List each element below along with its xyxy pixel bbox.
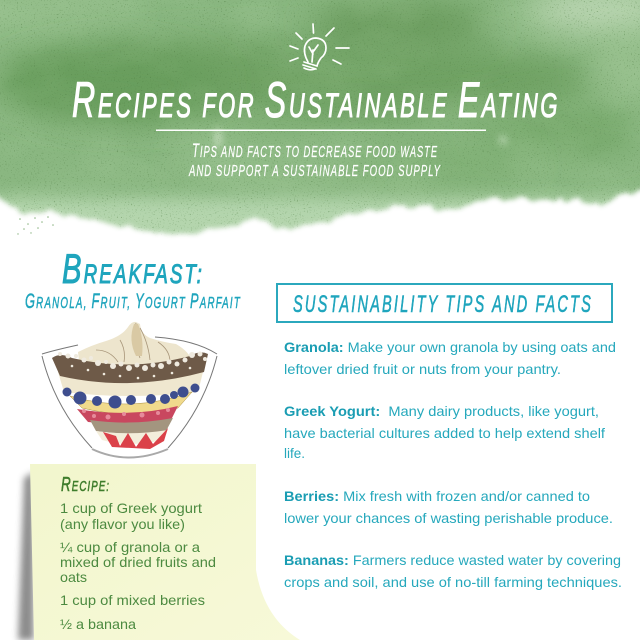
recipe ingredients: 1 cup of Greek yogurt	[60, 500, 202, 516]
panel: recipe sticky note	[30, 464, 300, 640]
tip: bananas: Bananas: Farmers reduce wasted water by covering	[284, 552, 621, 568]
recipe heading: RECIPE:	[61, 474, 110, 496]
title rule	[156, 130, 486, 131]
banana layer	[70, 392, 192, 414]
tip: greek yogurt: Greek Yogurt: Many dairy products, like yogurt,	[284, 403, 599, 419]
icon: light bulb	[290, 24, 349, 70]
title: RECIPES FOR SUSTAINABLE EATING	[72, 72, 560, 128]
tip: granola	[284, 339, 616, 377]
raspberries	[77, 406, 178, 424]
illustration: parfait bowl	[42, 322, 217, 458]
lower granola	[90, 418, 173, 434]
granola layer	[52, 352, 208, 383]
lower yogurt	[96, 430, 168, 444]
tip: greek yogurt: have bacterial cultures added to help extend shelf	[284, 425, 605, 441]
subtitle: TIPS AND FACTS TO DECREASE FOOD WASTE	[192, 141, 438, 162]
glass outline	[42, 337, 217, 448]
recipe ingredients: oats	[60, 569, 87, 585]
subtitle	[188, 141, 441, 180]
tip: bananas	[284, 552, 622, 590]
blueberries	[62, 384, 200, 408]
sticky note shadow	[18, 472, 34, 640]
subtitle: AND SUPPORT A SUSTAINABLE FOOD SUPPLY	[188, 163, 441, 180]
tip: bananas: crops and soil, and use of no-till farming techniques.	[284, 574, 622, 590]
recipe ingredients: ½ a banana	[60, 616, 136, 632]
strawberries	[103, 428, 168, 449]
heading box: sustainability tips and facts	[277, 284, 612, 322]
tip: berries: Berries: Mix fresh with frozen and/or canned to	[284, 488, 590, 504]
tip: berries: lower your chances of wasting perishable produce.	[284, 510, 613, 526]
recipe ingredients: 1 cup of mixed berries	[60, 592, 205, 608]
heading: breakfast: BREAKFAST:	[62, 245, 204, 292]
whipped cream	[78, 322, 192, 372]
subheading: parfait name: GRANOLA, FRUIT, YOGURT PARFAIT	[25, 290, 241, 313]
recipe ingredients: ¼ cup of granola or a	[60, 539, 200, 555]
recipe ingredients	[60, 500, 216, 632]
yogurt layer	[58, 368, 204, 396]
tip: greek yogurt: life.	[284, 445, 305, 461]
tip: berries	[284, 488, 613, 526]
watercolor header background	[0, 0, 640, 258]
recipe ingredients: (any flavor you like)	[60, 516, 185, 532]
tip: granola: leftover dried fruit or nuts from your pantry.	[284, 361, 561, 377]
tip: greek yogurt	[284, 403, 605, 461]
recipe ingredients: mixed of dried fruits and	[60, 554, 216, 570]
tip: granola: Granola: Make your own granola by using oats and	[284, 339, 616, 355]
speckled spray at lower left	[17, 216, 54, 235]
